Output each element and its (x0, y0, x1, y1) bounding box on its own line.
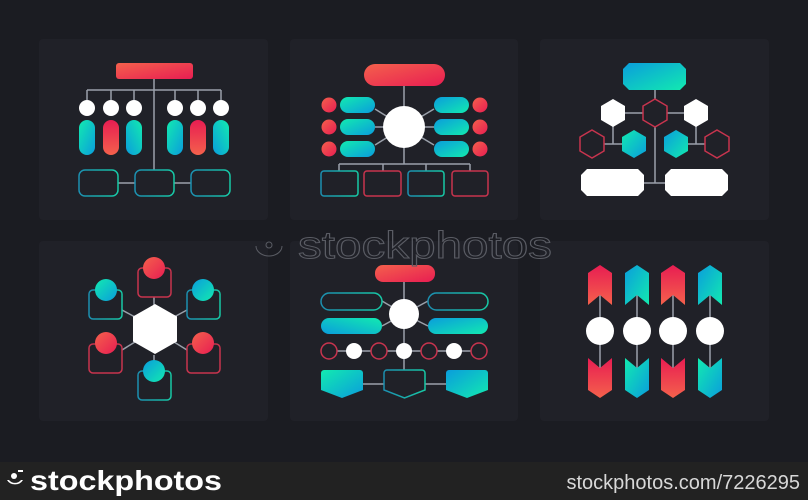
top bar (375, 265, 435, 282)
top bar (364, 64, 445, 86)
side nodes (322, 97, 488, 157)
footer logo (7, 470, 23, 484)
circles (586, 317, 724, 345)
circles (79, 100, 229, 116)
center hexagon (133, 304, 177, 354)
boxes (89, 268, 220, 400)
footer bar: stockphotos (30, 465, 222, 496)
center circle (383, 106, 425, 148)
footer bar (0, 462, 808, 500)
down chevrons (588, 358, 722, 398)
panel: flowchart mix (290, 241, 518, 421)
pills (321, 293, 488, 334)
circle row (321, 343, 487, 359)
circles (95, 257, 214, 382)
watermark: stockphotos (298, 225, 552, 267)
center circle (389, 299, 419, 329)
panel: mind map (290, 39, 518, 220)
watermark (256, 225, 552, 267)
panel: hierarchy tree (39, 39, 268, 220)
hexagons (580, 99, 729, 158)
bottom boxes (321, 171, 488, 196)
bottom boxes (79, 170, 230, 196)
top octagon (623, 63, 686, 90)
top bar (116, 63, 193, 79)
bottom octagons (581, 169, 728, 196)
panel: hexagon radial (39, 241, 268, 421)
panel: hexagon hierarchy (540, 39, 769, 220)
panel: arrow columns (540, 241, 769, 421)
up chevrons (588, 265, 722, 305)
bottom shapes (321, 370, 488, 398)
footer id: stockphotos.com/7226295 (566, 472, 800, 494)
pills (79, 120, 229, 155)
